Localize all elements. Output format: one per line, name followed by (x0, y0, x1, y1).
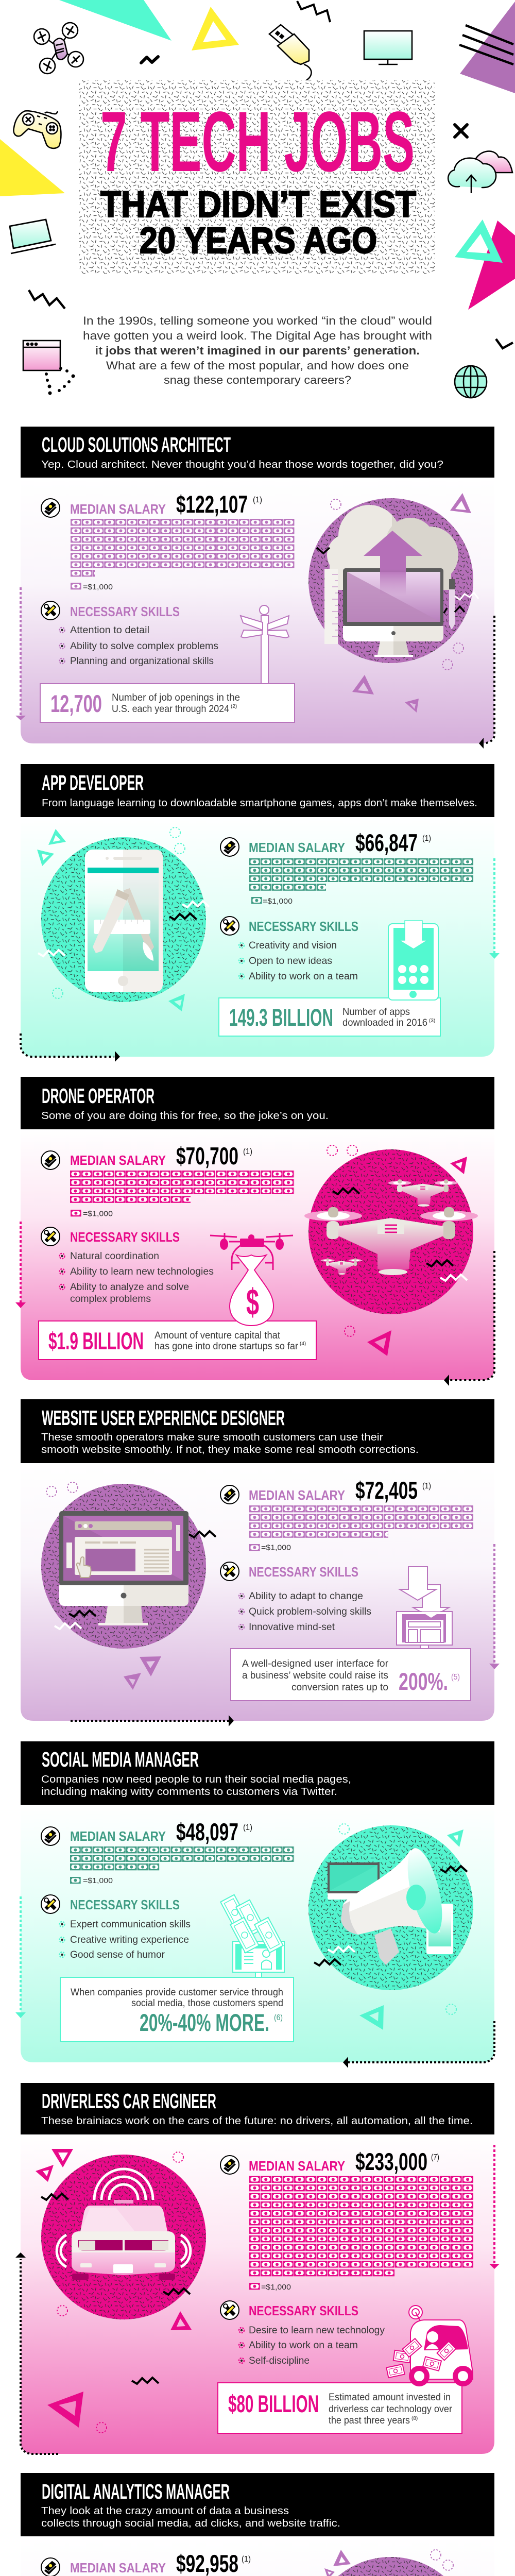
icon: arrows into monitor (397, 1567, 452, 1653)
necessary skills: Ability to learn new technologies (70, 1266, 214, 1277)
arrow: dotted right (479, 616, 494, 749)
arrow: dotted right (343, 2021, 494, 2068)
icon: laptop (10, 219, 56, 253)
stat box: U.S. each year through 2024 (112, 704, 229, 715)
panel: social media manager (15, 1741, 494, 2068)
header: SOCIAL MEDIA MANAGER (42, 1748, 199, 1771)
decorative top shapes (0, 0, 515, 348)
stat box: $80 BILLION (228, 2390, 319, 2417)
median salary: MEDIAN SALARY (70, 2560, 166, 2575)
necessary skills (41, 1227, 214, 1304)
median salary (41, 1142, 252, 1170)
panel: digital analytics manager (21, 2473, 494, 2576)
legend (251, 897, 293, 906)
icon: monitor (364, 31, 412, 64)
intro paragraph: it (95, 344, 102, 357)
header: APP DEVELOPER (42, 771, 144, 794)
panel: drone operator (15, 1077, 494, 1386)
necessary skills: Innovative mind-set (249, 1622, 335, 1633)
median salary: (1) (242, 2555, 251, 2564)
title line 2: THAT DIDN’T EXIST (100, 184, 416, 225)
icon: phone download (388, 921, 438, 1000)
stat box: (4) (300, 1341, 306, 1347)
necessary skills: Ability to adapt to change (249, 1591, 363, 1602)
stat box: Number of job openings in the (112, 692, 240, 703)
header: DRIVERLESS CAR ENGINEER (42, 2089, 216, 2113)
intro paragraph: jobs that weren’t imagined in our parents’ generation. (105, 344, 420, 357)
header (21, 2473, 494, 2536)
icon: autonomous toy car (386, 2306, 473, 2386)
icon: signpost (241, 605, 289, 688)
header: Companies now need people to run their social media pages, (41, 1773, 351, 1785)
illustration: website on monitor (41, 1482, 216, 1690)
legend (70, 1876, 113, 1885)
header: These brainiacs work on the cars of the future: no drivers, all automation, all the time. (41, 2115, 473, 2127)
header (21, 1077, 494, 1129)
median salary: (1) (243, 1147, 252, 1156)
icon: drone carrying money bag (210, 1233, 293, 1326)
legend: =$1,000 (83, 1876, 113, 1885)
arrow: dotted left (21, 1033, 120, 1062)
illustration: self-driving car (36, 2149, 206, 2433)
median salary: $72,405 (355, 1477, 418, 1504)
intro paragraph (83, 314, 432, 386)
necessary skills: Good sense of humor (70, 1950, 165, 1960)
necessary skills: Ability to analyze and solve (70, 1282, 189, 1293)
stat box: 20%-40% MORE. (140, 2009, 269, 2036)
stat box: Amount of venture capital that (154, 1330, 281, 1341)
arrow: dotted right (444, 1251, 494, 1386)
header (21, 2083, 494, 2134)
median salary: $122,107 (176, 490, 248, 518)
stat box: (5) (451, 1673, 460, 1682)
median salary: $66,847 (355, 829, 418, 856)
stat box: A well-designed user interface for (242, 1658, 389, 1669)
header (21, 764, 494, 817)
necessary skills: Creative writing experience (70, 1935, 189, 1945)
stat box: (6) (274, 2013, 283, 2022)
stat box: Number of apps (342, 1007, 410, 1018)
stat box: Estimated amount invested in (329, 2392, 451, 2403)
intro paragraph: have gotten you a weird look. The Digital Age has brought with (83, 329, 432, 342)
necessary skills: Open to new ideas (249, 956, 332, 967)
stat box: (2) (231, 704, 237, 709)
stat box (218, 2383, 462, 2433)
stat box: 200%. (399, 1668, 448, 1695)
legend: =$1,000 (83, 1210, 113, 1218)
necessary skills: Attention to detail (70, 625, 149, 636)
stat box (40, 684, 295, 722)
stat box (39, 1321, 316, 1360)
median salary: MEDIAN SALARY (70, 1153, 166, 1168)
salary pictogram (70, 1846, 294, 1870)
median salary (41, 490, 262, 518)
illustration: cloud computer (308, 493, 478, 713)
panel: website user experience designer (21, 1399, 500, 1726)
salary pictogram (70, 1171, 294, 1203)
header: From language learning to downloadable smartphone games, apps don’t make themselves. (42, 797, 477, 809)
median salary (220, 1477, 431, 1504)
intro paragraph: In the 1990s, telling someone you worked “in the cloud” would (83, 314, 432, 327)
icon: globe (455, 366, 487, 398)
arrow: dashed left (15, 587, 26, 720)
legend: =$1,000 (263, 897, 293, 906)
arrow: dotted bottom (71, 1715, 234, 1726)
header: Some of you are doing this for free, so the joke’s on you. (41, 1110, 329, 1122)
stat box: social media, those customers spend (131, 1998, 283, 2009)
stat box (219, 998, 440, 1036)
illustration: analytics devices (308, 2550, 473, 2576)
necessary skills: Creativity and vision (249, 940, 337, 951)
stat box: driverless car technology over (329, 2404, 453, 2415)
necessary skills: Quick problem-solving skills (249, 1606, 371, 1617)
necessary skills: NECESSARY SKILLS (70, 1229, 180, 1245)
median salary: (1) (253, 496, 262, 504)
stat box: 12,700 (50, 690, 102, 717)
necessary skills (220, 1562, 371, 1633)
necessary skills: Ability to work on a team (249, 971, 358, 982)
stat box: has gone into drone startups so far (154, 1341, 299, 1352)
stat box: (8) (411, 2416, 418, 2421)
header (21, 427, 494, 478)
legend: =$1,000 (83, 583, 113, 591)
stat box: downloaded in 2016 (342, 1018, 427, 1028)
median salary: (7) (431, 2153, 439, 2162)
icon: clouds upload (448, 151, 512, 193)
icon: game controller (13, 111, 61, 148)
intro paragraph: snag these contemporary careers? (164, 374, 351, 386)
legend (71, 1210, 113, 1218)
header: DRONE OPERATOR (42, 1084, 154, 1108)
necessary skills: Natural coordination (70, 1251, 159, 1262)
stat box (60, 1977, 294, 2042)
header: WEBSITE USER EXPERIENCE DESIGNER (42, 1406, 285, 1430)
necessary skills: Ability to solve complex problems (70, 641, 218, 652)
arrow: dashed left (15, 1896, 26, 2018)
necessary skills: NECESSARY SKILLS (70, 1897, 180, 1912)
stat box: When companies provide customer service through (71, 1987, 283, 1998)
illustration: drones (304, 1145, 478, 1356)
title line 3: 20 YEARS AGO (140, 221, 377, 261)
legend (249, 2283, 291, 2292)
header: including making witty comments to customers via Twitter. (41, 1786, 337, 1798)
header (21, 1741, 494, 1805)
arrow: dashed right (489, 858, 500, 959)
salary pictogram (71, 519, 295, 577)
legend (71, 583, 113, 591)
icon: drone (34, 23, 83, 74)
icon: drone carrying money bag: $ (246, 1282, 259, 1323)
arrow: dashed right (489, 1544, 500, 1669)
salary pictogram (249, 858, 473, 891)
median salary (41, 1818, 252, 1845)
median salary: MEDIAN SALARY (249, 840, 345, 855)
median salary: MEDIAN SALARY (249, 1487, 345, 1503)
necessary skills (41, 1895, 191, 1960)
necessary skills: NECESSARY SKILLS (249, 1564, 358, 1580)
stat box: conversion rates up to (291, 1682, 388, 1693)
header: DIGITAL ANALYTICS MANAGER (42, 2480, 230, 2503)
median salary: $233,000 (355, 2148, 427, 2175)
stat box (231, 1649, 471, 1701)
salary pictogram (249, 2176, 473, 2276)
header: These smooth operators make sure smooth customers can use their (41, 1431, 383, 1443)
arrow: dashed right (489, 2145, 500, 2269)
arrow: dotted left (15, 2252, 58, 2454)
median salary (220, 829, 431, 856)
title block (79, 80, 435, 274)
arrow: dashed left (15, 1222, 26, 1308)
header (21, 1399, 494, 1463)
necessary skills: NECESSARY SKILLS (70, 604, 180, 619)
median salary: MEDIAN SALARY (70, 501, 166, 517)
panel: app developer (21, 764, 500, 1062)
stat box: the past three years (329, 2415, 410, 2426)
necessary skills (220, 2301, 385, 2366)
necessary skills: Ability to work on a team (249, 2340, 358, 2351)
legend: =$1,000 (261, 1544, 291, 1552)
necessary skills: Desire to learn new technology (249, 2325, 385, 2336)
necessary skills (220, 917, 358, 982)
necessary skills: Planning and organizational skills (70, 656, 214, 667)
icon: usb mouse (269, 25, 312, 91)
median salary: (1) (422, 1482, 431, 1490)
legend: =$1,000 (261, 2283, 291, 2292)
stat box: a business’ website could raise its (242, 1670, 388, 1681)
median salary: $48,097 (176, 1818, 238, 1845)
median salary (220, 2148, 439, 2175)
legend (249, 1544, 291, 1552)
median salary: (1) (422, 834, 431, 843)
dotted v shape (45, 367, 75, 395)
median salary: $70,700 (176, 1142, 238, 1170)
necessary skills: complex problems (70, 1294, 151, 1304)
necessary skills: Expert communication skills (70, 1919, 191, 1930)
illustration: smartphone (37, 827, 209, 1011)
necessary skills: Self-discipline (249, 2355, 310, 2366)
header: CLOUD SOLUTIONS ARCHITECT (42, 433, 231, 456)
necessary skills: NECESSARY SKILLS (249, 2303, 358, 2318)
panel: driverless car engineer (15, 2083, 500, 2454)
icon: browser window (23, 341, 60, 370)
header: Yep. Cloud architect. Never thought you’d hear those words together, did you? (41, 459, 443, 470)
necessary skills (41, 601, 218, 667)
salary pictogram (249, 1505, 473, 1538)
panel: cloud solutions architect (15, 427, 494, 749)
stat box: (3) (429, 1018, 435, 1024)
median salary: (1) (243, 1823, 252, 1832)
necessary skills: NECESSARY SKILLS (249, 919, 358, 934)
intro paragraph: What are a few of the most popular, and how does one (106, 359, 409, 372)
header: smooth website smoothly. If not, they make some real smooth corrections. (41, 1444, 419, 1455)
header: collects through social media, ad clicks, and website traffic. (41, 2517, 340, 2529)
median salary: MEDIAN SALARY (249, 2158, 345, 2174)
median salary (41, 2550, 251, 2576)
stat box: 149.3 BILLION (229, 1004, 333, 1031)
header: They look at the crazy amount of data a business (41, 2505, 289, 2517)
stat box: $1.9 BILLION (48, 1327, 144, 1354)
icon: money into monitor (220, 1895, 284, 1980)
illustration: megaphone (308, 1824, 473, 2030)
median salary: MEDIAN SALARY (70, 1828, 166, 1844)
